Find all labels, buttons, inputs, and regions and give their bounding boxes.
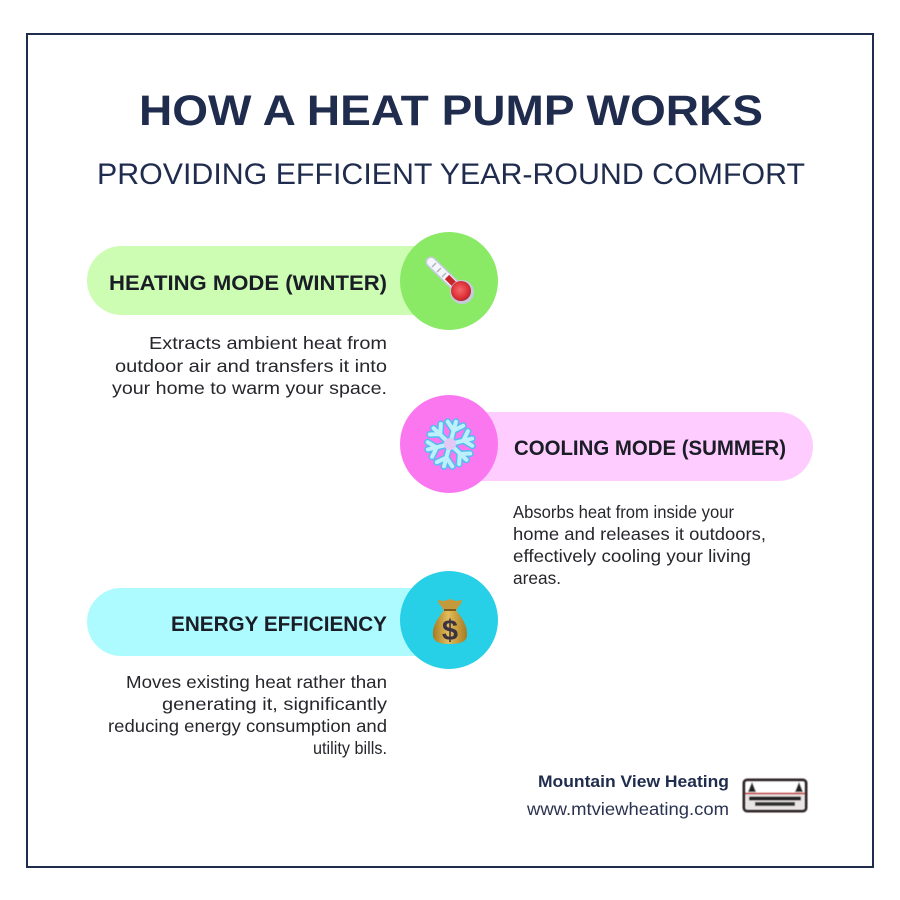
icon: thermometer [431,262,474,304]
heating description [112,333,387,398]
panel: cooling mode [400,395,813,588]
icon: money bag: $ [442,615,458,647]
website: www.mtviewheating.com [526,799,729,819]
heating pill [87,246,457,315]
icon: snowflake [423,416,477,472]
subtitle: PROVIDING EFFICIENT YEAR-ROUND COMFORT [97,158,805,191]
efficiency description: Moves existing heat rather than [126,672,387,692]
heating circle [400,232,498,330]
title: HOW A HEAT PUMP WORKS [139,87,763,135]
icon: company logo [744,780,806,811]
panel: heating mode [87,232,498,398]
cooling description [513,502,766,588]
icon: money bag [433,599,467,647]
efficiency description: generating it, significantly [162,694,387,714]
cooling description: home and releases it outdoors, [513,524,766,544]
panel: energy efficiency [87,571,498,758]
cooling circle [400,395,498,493]
heating description: your home to warm your space. [112,378,387,398]
efficiency description [108,672,387,758]
efficiency heading: ENERGY EFFICIENCY [171,613,387,636]
cooling heading: COOLING MODE (SUMMER) [514,437,786,460]
efficiency circle [400,571,498,669]
cooling pill [443,412,813,481]
cooling description: effectively cooling your living [513,546,751,566]
efficiency description: utility bills. [313,738,387,758]
efficiency description: reducing energy consumption and [108,716,387,736]
cooling description: areas. [513,568,561,588]
efficiency pill [87,588,457,656]
heating description: outdoor air and transfers it into [115,356,387,376]
heating description: Extracts ambient heat from [149,333,387,353]
cooling description: Absorbs heat from inside your [513,502,734,522]
company name: Mountain View Heating [538,772,729,791]
heating heading: HEATING MODE (WINTER) [109,272,387,295]
